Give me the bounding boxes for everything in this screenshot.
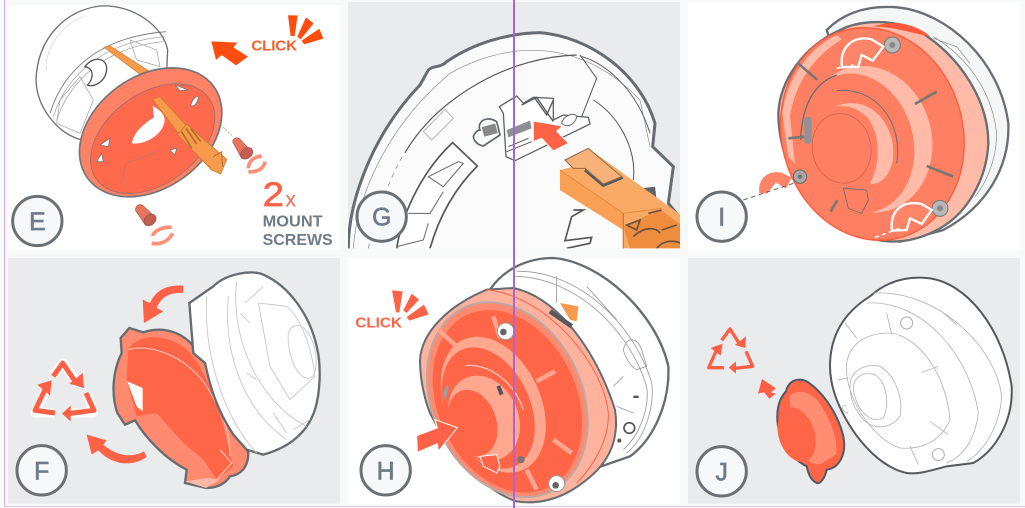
panel G: connect ethernet plug — [348, 2, 683, 253]
white camera — [189, 272, 320, 455]
curved arrow top — [143, 286, 183, 323]
lower bracket tab — [565, 210, 592, 248]
red camera front — [396, 276, 618, 508]
red cover — [114, 328, 248, 488]
step badge G — [357, 192, 406, 241]
rotate arrow left — [759, 172, 792, 193]
click label: CLICK — [251, 39, 297, 55]
recycle icon — [35, 363, 94, 421]
cable behind bracket — [104, 46, 150, 77]
ethernet cable and plug — [153, 97, 227, 174]
panel H: click camera in place — [348, 258, 680, 508]
quantity 2x: 2 — [263, 176, 284, 214]
red mounting ring — [55, 41, 247, 223]
click burst — [392, 290, 429, 321]
red lens cap — [771, 380, 844, 483]
rear housing — [490, 258, 668, 468]
rotate arrow top — [837, 38, 883, 68]
white camera — [830, 278, 1012, 473]
step badge E — [13, 196, 62, 246]
quantity 2x — [263, 176, 296, 214]
red front housing — [757, 7, 988, 261]
mount screws label: MOUNT — [263, 214, 323, 231]
rotate icon upper — [248, 156, 265, 172]
network socket — [499, 96, 590, 161]
screw top — [884, 37, 900, 53]
step badge H: H — [377, 458, 395, 485]
arrow: insert plug — [533, 121, 569, 151]
panel I: fasten screws — [688, 2, 1020, 261]
arrow: press — [417, 420, 457, 452]
screw — [473, 119, 500, 146]
step badge I — [697, 192, 746, 241]
quantity 2x: x — [285, 188, 296, 212]
rotate icon lower — [152, 227, 173, 244]
step badge E: E — [29, 209, 46, 236]
arrow: discard cap — [758, 379, 776, 399]
screw bottom — [549, 476, 565, 492]
panel J: remove lens cap — [688, 258, 1020, 504]
screw left — [793, 170, 807, 183]
step badge F: F — [34, 458, 49, 485]
panel E: mounting bracket — [8, 5, 340, 250]
recycle icon — [709, 329, 753, 374]
step badge F — [17, 446, 66, 495]
step badge I: I — [718, 205, 725, 232]
curved arrow bottom — [87, 435, 147, 463]
step badge J — [697, 447, 746, 496]
step badge G: G — [372, 205, 391, 232]
panel F: remove cover — [8, 258, 340, 504]
mount screws label second line: SCREWS — [263, 232, 333, 249]
step badge H — [361, 446, 410, 495]
click label: CLICK — [355, 316, 402, 332]
dashed guide line — [743, 183, 793, 200]
dome housing — [36, 6, 168, 140]
screw bottom — [932, 200, 948, 216]
click burst — [288, 15, 323, 44]
arrow: click direction — [211, 41, 248, 65]
step badge J: J — [716, 459, 728, 486]
screw upper — [218, 123, 255, 161]
rotate arrow bottom — [875, 203, 932, 237]
orange plug — [560, 148, 683, 248]
camera body rim — [827, 7, 1008, 242]
screw lower — [135, 205, 158, 228]
screw top — [497, 323, 514, 340]
camera base — [348, 33, 683, 253]
